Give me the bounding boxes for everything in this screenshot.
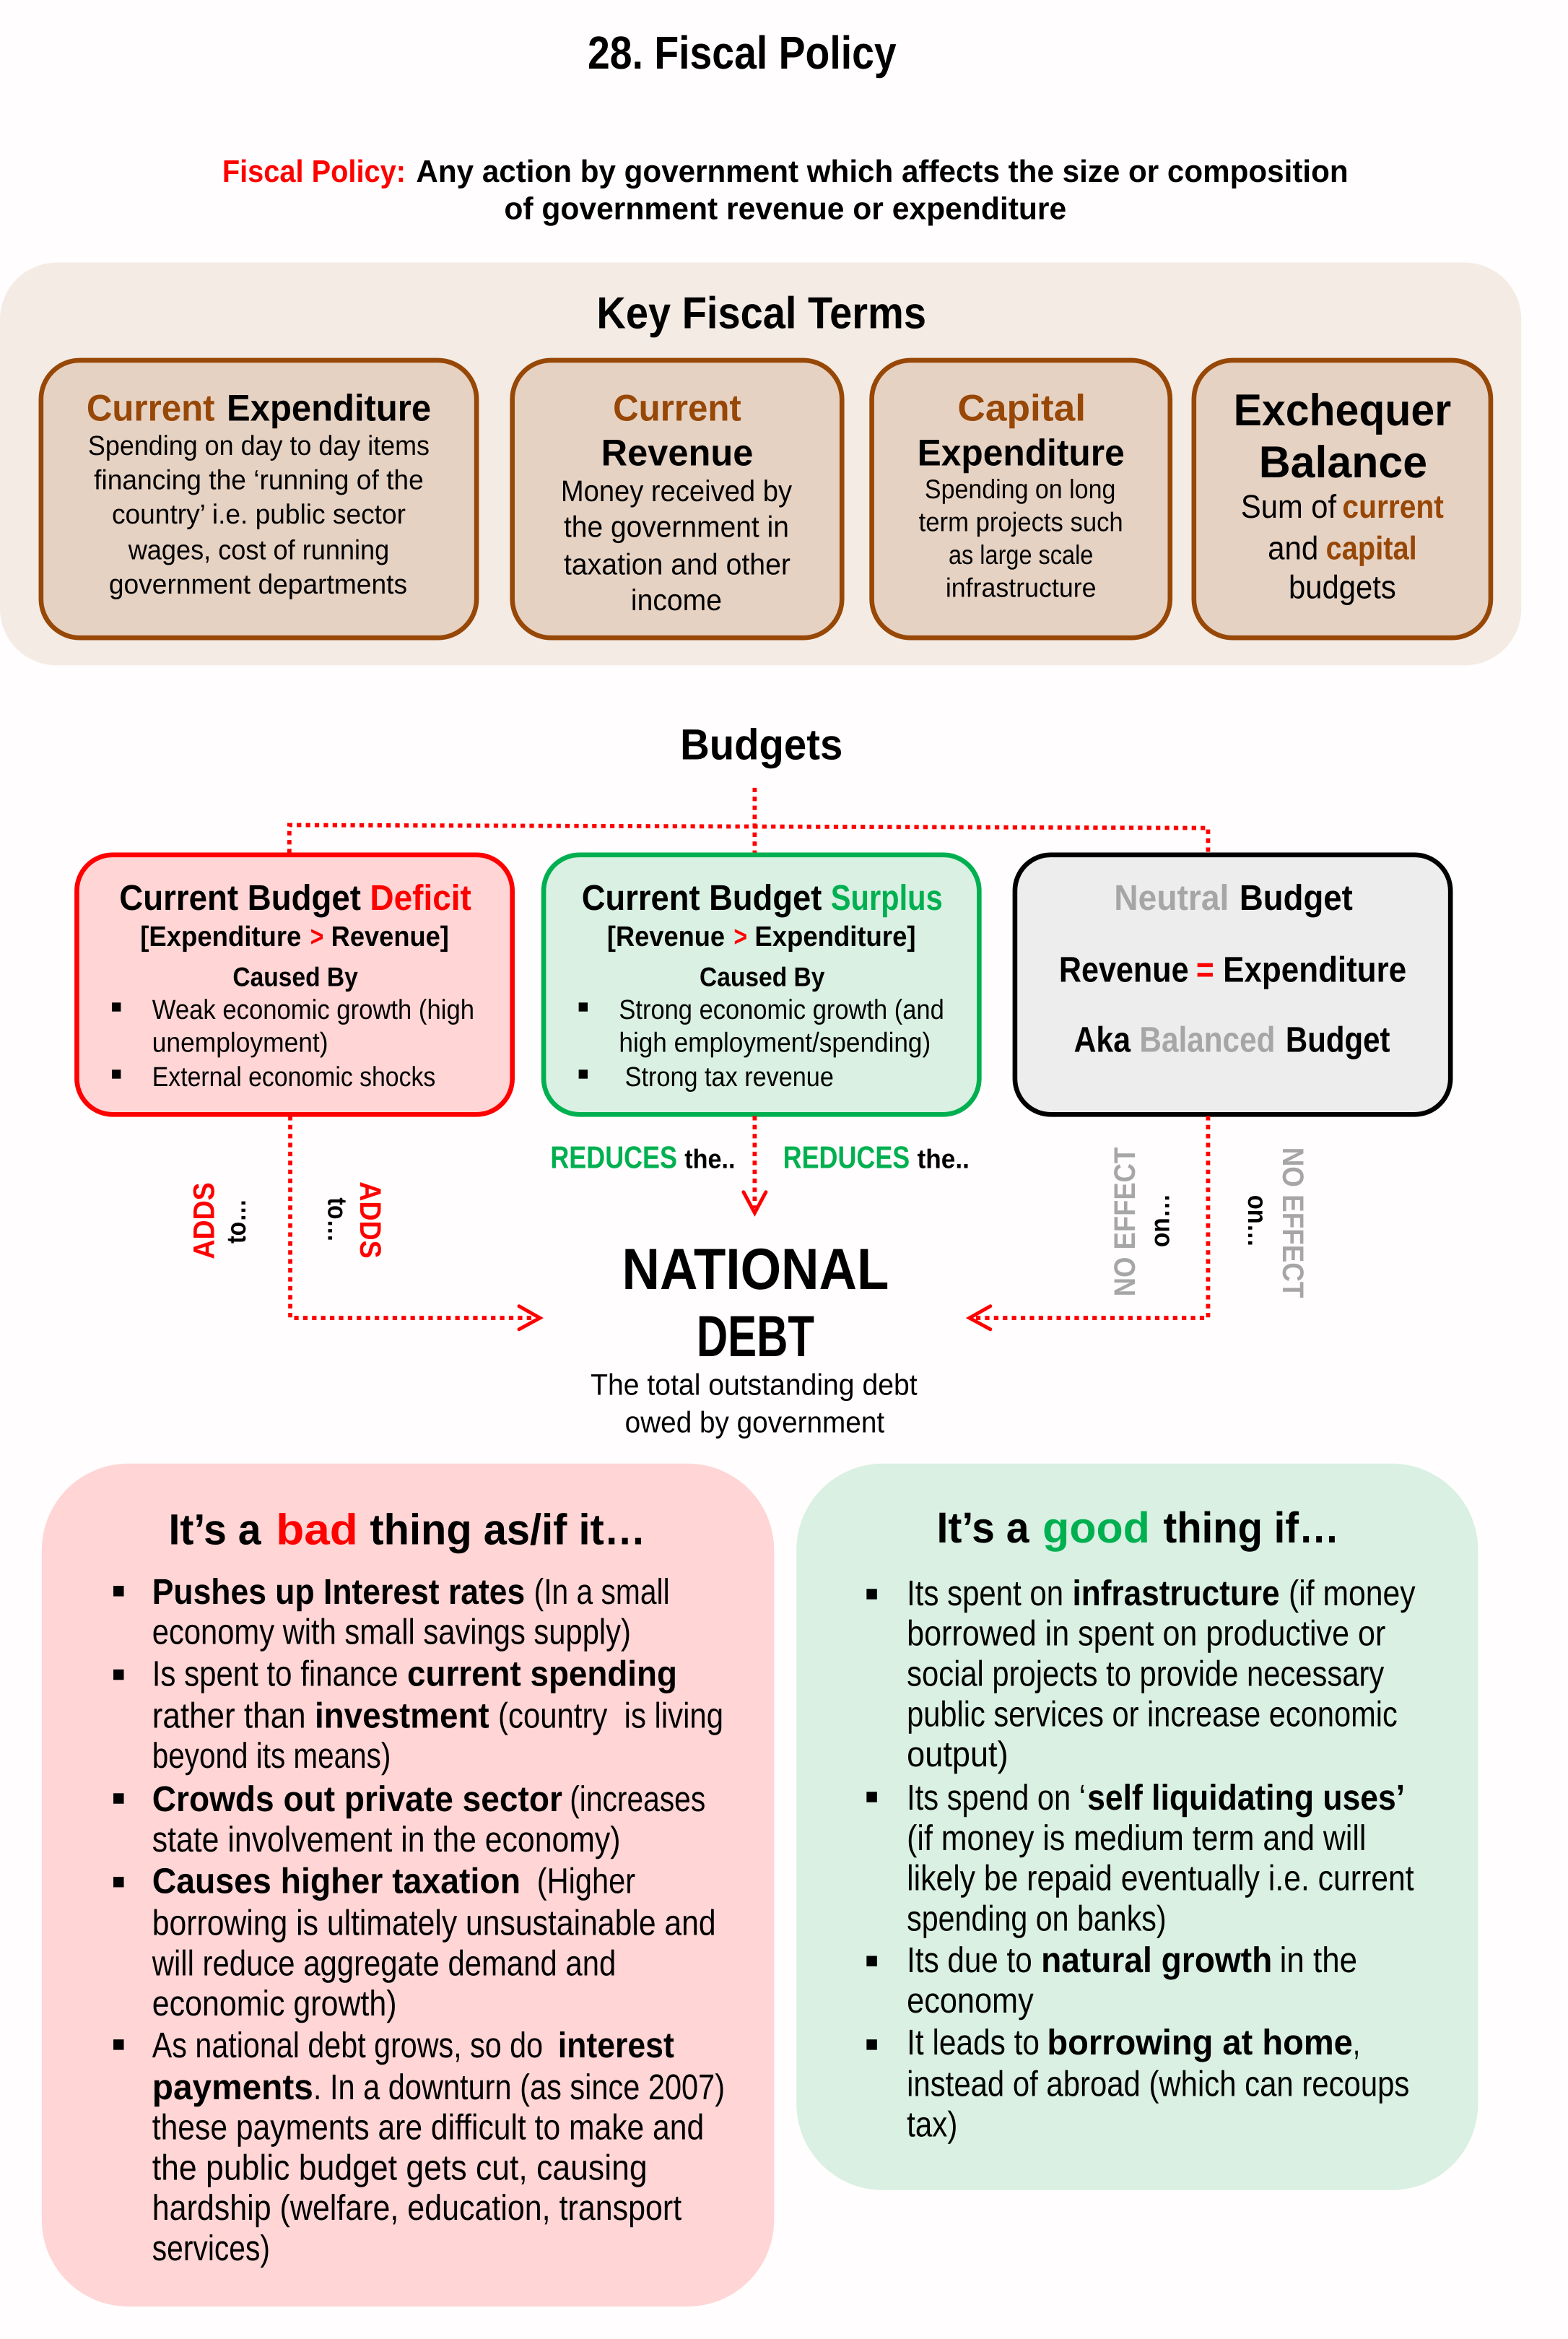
definition text: Fiscal Policy: <box>222 155 406 189</box>
card: neutral budget: Aka <box>1074 1020 1131 1061</box>
bullets: good thing list: output) <box>907 1735 1009 1775</box>
card: neutral budget: Budget <box>1286 1020 1390 1061</box>
card: current budget deficit: Weak economic growth (high <box>152 994 474 1025</box>
card: capital expenditure: Capital <box>957 388 1086 430</box>
card: current revenue: Revenue <box>601 433 754 474</box>
card: current budget deficit: Deficit <box>370 879 471 919</box>
card: current budget surplus: Strong economic growth (and <box>619 994 944 1025</box>
card: capital expenditure: Spending on long <box>925 474 1115 504</box>
card: capital expenditure: term projects such <box>919 507 1123 537</box>
bullets: bad thing list: beyond its means) <box>152 1737 391 1777</box>
card: exchequer balance: Balance <box>1259 438 1427 488</box>
national debt block: owed by government <box>625 1407 885 1440</box>
card: exchequer balance <box>1194 360 1491 638</box>
definition text: Any action by government which affects the size or composition <box>416 155 1349 189</box>
card: current expenditure: government departments <box>109 568 407 600</box>
card: current budget surplus: [Revenue <box>607 922 725 953</box>
label: no effect on, right: NO EFFECT <box>1275 1147 1308 1298</box>
label: reduces the, right: REDUCES <box>783 1141 910 1176</box>
title: 28. Fiscal Policy <box>588 27 897 79</box>
card: neutral budget: = <box>1196 950 1214 991</box>
national debt block: NATIONAL <box>622 1238 889 1303</box>
bullets: good thing list: Its spend on ‘ <box>907 1779 1086 1818</box>
card: current budget surplus: Surplus <box>831 879 943 919</box>
card: current budget surplus <box>544 855 979 1114</box>
bullets: bad thing list <box>113 1573 725 2269</box>
bullets: good thing list: , <box>1353 2023 1360 2063</box>
card: exchequer balance: current <box>1342 488 1445 525</box>
arrow: deficit to national debt <box>290 1116 540 1329</box>
card: current expenditure: country’ i.e. public sector <box>112 498 406 529</box>
definition text <box>222 155 1349 227</box>
panel: good thing <box>796 1464 1478 2190</box>
label: reduces the, right: the.. <box>918 1145 970 1174</box>
bullets: bad thing list: current spending <box>407 1654 677 1695</box>
heading: key fiscal terms: Key Fiscal Terms <box>596 290 926 339</box>
bullets: good thing list: economy <box>907 1982 1034 2021</box>
bullets: bad thing list: the public budget gets cut, causing <box>152 2148 648 2189</box>
bullets: good thing list: natural growth <box>1041 1941 1272 1982</box>
card: current budget surplus: Strong tax revenue <box>625 1061 834 1092</box>
bullets: good thing list: infrastructure <box>1072 1574 1280 1614</box>
label: no effect on, left: NO EFFECT <box>1110 1147 1143 1296</box>
card: current expenditure: Expenditure <box>227 388 431 430</box>
card: current budget surplus: Current Budget <box>582 879 822 919</box>
bullets: bad thing list: Pushes up Interest rates <box>152 1573 525 1613</box>
card: current expenditure: Current <box>87 388 216 430</box>
card: current budget deficit: > <box>310 922 323 953</box>
card: current expenditure <box>41 360 476 638</box>
bullets: bad thing list: services) <box>152 2229 270 2269</box>
card: current budget deficit: Revenue] <box>331 922 449 953</box>
arrow: neutral to national debt <box>970 1116 1208 1329</box>
bullets: good thing list: likely be repaid eventually i.e. current <box>907 1859 1414 1899</box>
definition text: of government revenue or expenditure <box>504 193 1066 227</box>
card: exchequer balance: Exchequer <box>1234 386 1452 435</box>
label: adds to, right <box>322 1181 386 1259</box>
bullets: good thing list: self liquidating uses’ <box>1087 1779 1405 1818</box>
card: current budget surplus: Caused By <box>700 963 825 992</box>
heading: bad thing: It’s a <box>168 1507 262 1555</box>
bullets: bad thing list: Causes higher taxation <box>152 1862 521 1902</box>
heading: bad thing <box>168 1507 646 1555</box>
card: neutral budget: Revenue <box>1059 950 1189 991</box>
card: current budget deficit <box>77 855 513 1114</box>
heading: bad thing: bad <box>276 1507 358 1555</box>
card: neutral budget <box>1015 855 1450 1114</box>
card: current revenue: the government in <box>564 512 789 544</box>
bullets: good thing list: social projects to provide necessary <box>907 1654 1384 1695</box>
bullets: good thing list: Its due to <box>907 1941 1032 1982</box>
card: current budget deficit: External economic shocks <box>152 1061 435 1092</box>
connector: budgets tree <box>289 788 1208 854</box>
bullets: good thing list: spending on banks) <box>907 1899 1167 1940</box>
heading: bad thing: thing as/if it… <box>370 1507 646 1555</box>
bullets: bad thing list: economic growth) <box>152 1984 397 2024</box>
bullets: bad thing list: (In a small <box>534 1573 670 1613</box>
card: current revenue: income <box>631 585 722 617</box>
card: current budget deficit: Current Budget <box>119 879 361 919</box>
arrow: surplus to national debt <box>744 1116 766 1213</box>
card: neutral budget: Balanced <box>1139 1020 1275 1061</box>
card: exchequer balance: and <box>1268 529 1318 567</box>
bullets: bad thing list: payments <box>152 2067 313 2108</box>
bullets: good thing list: (if money is medium term and will <box>907 1818 1366 1859</box>
bullets: bad thing list: (Higher <box>537 1862 635 1902</box>
card: current expenditure: wages, cost of running <box>127 534 389 565</box>
bullets: bad thing list: (increases <box>570 1780 705 1820</box>
card: neutral budget: Expenditure <box>1223 950 1406 991</box>
bullets: good thing list: It leads to <box>907 2023 1040 2063</box>
card: current budget surplus: Expenditure] <box>754 922 916 953</box>
label: adds to, right: ADDS <box>353 1181 386 1259</box>
heading: good thing: thing if… <box>1163 1506 1339 1553</box>
card: capital expenditure: infrastructure <box>946 573 1097 603</box>
bullets: good thing list: (if money <box>1289 1574 1416 1614</box>
bullets: bad thing list: investment <box>315 1696 489 1737</box>
bullets: bad thing list: . In a downturn (as since 2007) <box>313 2067 725 2108</box>
bullets: good thing list: Its spent on <box>907 1574 1063 1614</box>
card: exchequer balance: capital <box>1326 529 1417 567</box>
heading: good thing <box>936 1506 1339 1553</box>
bullets: bad thing list: (country is living <box>498 1696 723 1737</box>
bullets: bad thing list: Is spent to finance <box>152 1654 398 1695</box>
card: current revenue: taxation and other <box>564 549 791 582</box>
bullets: bad thing list: economy with small savings supply) <box>152 1613 631 1653</box>
bullets: good thing list: tax) <box>907 2105 957 2145</box>
bullets: bad thing list: borrowing is ultimately unsustainable and <box>152 1904 716 1944</box>
card: current budget deficit: Caused By <box>232 963 358 992</box>
bullets: bad thing list: will reduce aggregate demand and <box>151 1944 616 1984</box>
heading: good thing: It’s a <box>936 1506 1030 1553</box>
card: current expenditure: Spending on day to day items <box>88 430 430 461</box>
bullets: good thing list <box>866 1574 1416 2145</box>
card: neutral budget: Budget <box>1240 879 1353 919</box>
card: current budget surplus: > <box>733 922 747 953</box>
card: exchequer balance: Sum of <box>1241 488 1338 525</box>
card: current revenue: Current <box>613 388 742 430</box>
card: current budget deficit: [Expenditure <box>140 922 301 953</box>
card: capital expenditure: as large scale <box>949 540 1093 570</box>
bullets: bad thing list: rather than <box>152 1696 306 1737</box>
label: reduces the, left: REDUCES <box>550 1141 677 1176</box>
bullets: bad thing list: Crowds out private sector <box>152 1780 562 1820</box>
bullets: bad thing list: state involvement in the economy) <box>152 1820 620 1860</box>
bullets: bad thing list: these payments are difficult to make and <box>152 2108 704 2148</box>
national debt block: DEBT <box>697 1306 814 1370</box>
card: current budget deficit: unemployment) <box>152 1026 328 1058</box>
card: exchequer balance: budgets <box>1289 568 1396 606</box>
card: capital expenditure <box>872 360 1170 638</box>
card: current revenue: Money received by <box>561 476 792 508</box>
national debt block: The total outstanding debt <box>591 1370 918 1402</box>
card: current expenditure: financing the ‘running of the <box>94 464 424 495</box>
label: adds to, left: ADDS <box>188 1182 222 1259</box>
bullets: good thing list: borrowed in spent on productive or <box>907 1614 1385 1654</box>
label: no effect on, right <box>1242 1147 1308 1298</box>
label: adds to, left: to… <box>222 1199 251 1244</box>
label: reduces the, left: the.. <box>684 1145 736 1174</box>
heading: good thing: good <box>1042 1506 1150 1553</box>
label: no effect on, left: on… <box>1146 1194 1175 1247</box>
label: adds to, right: to… <box>322 1197 352 1242</box>
panel: bad thing <box>42 1464 774 2307</box>
panel: key fiscal terms <box>0 263 1521 665</box>
bullets: bad thing list: hardship (welfare, education, transport <box>152 2189 682 2229</box>
heading: budgets: Budgets <box>680 722 842 770</box>
bullets: bad thing list: interest <box>558 2026 674 2066</box>
bullets: bad thing list: As national debt grows, so do <box>152 2026 543 2066</box>
label: adds to, left <box>188 1182 251 1259</box>
card: current revenue <box>513 360 842 638</box>
card: neutral budget: Neutral <box>1114 879 1229 919</box>
card: current budget surplus: high employment/spending) <box>619 1026 931 1058</box>
national debt block <box>591 1238 918 1440</box>
bullets: good thing list: in the <box>1280 1941 1357 1982</box>
label: no effect on, left <box>1110 1147 1175 1296</box>
label: no effect on, right: on… <box>1242 1195 1272 1247</box>
bullets: good thing list: instead of abroad (which can recoups <box>907 2065 1409 2105</box>
card: capital expenditure: Expenditure <box>918 433 1125 474</box>
bullets: good thing list: public services or increase economic <box>907 1695 1398 1735</box>
bullets: good thing list: borrowing at home <box>1047 2023 1353 2063</box>
